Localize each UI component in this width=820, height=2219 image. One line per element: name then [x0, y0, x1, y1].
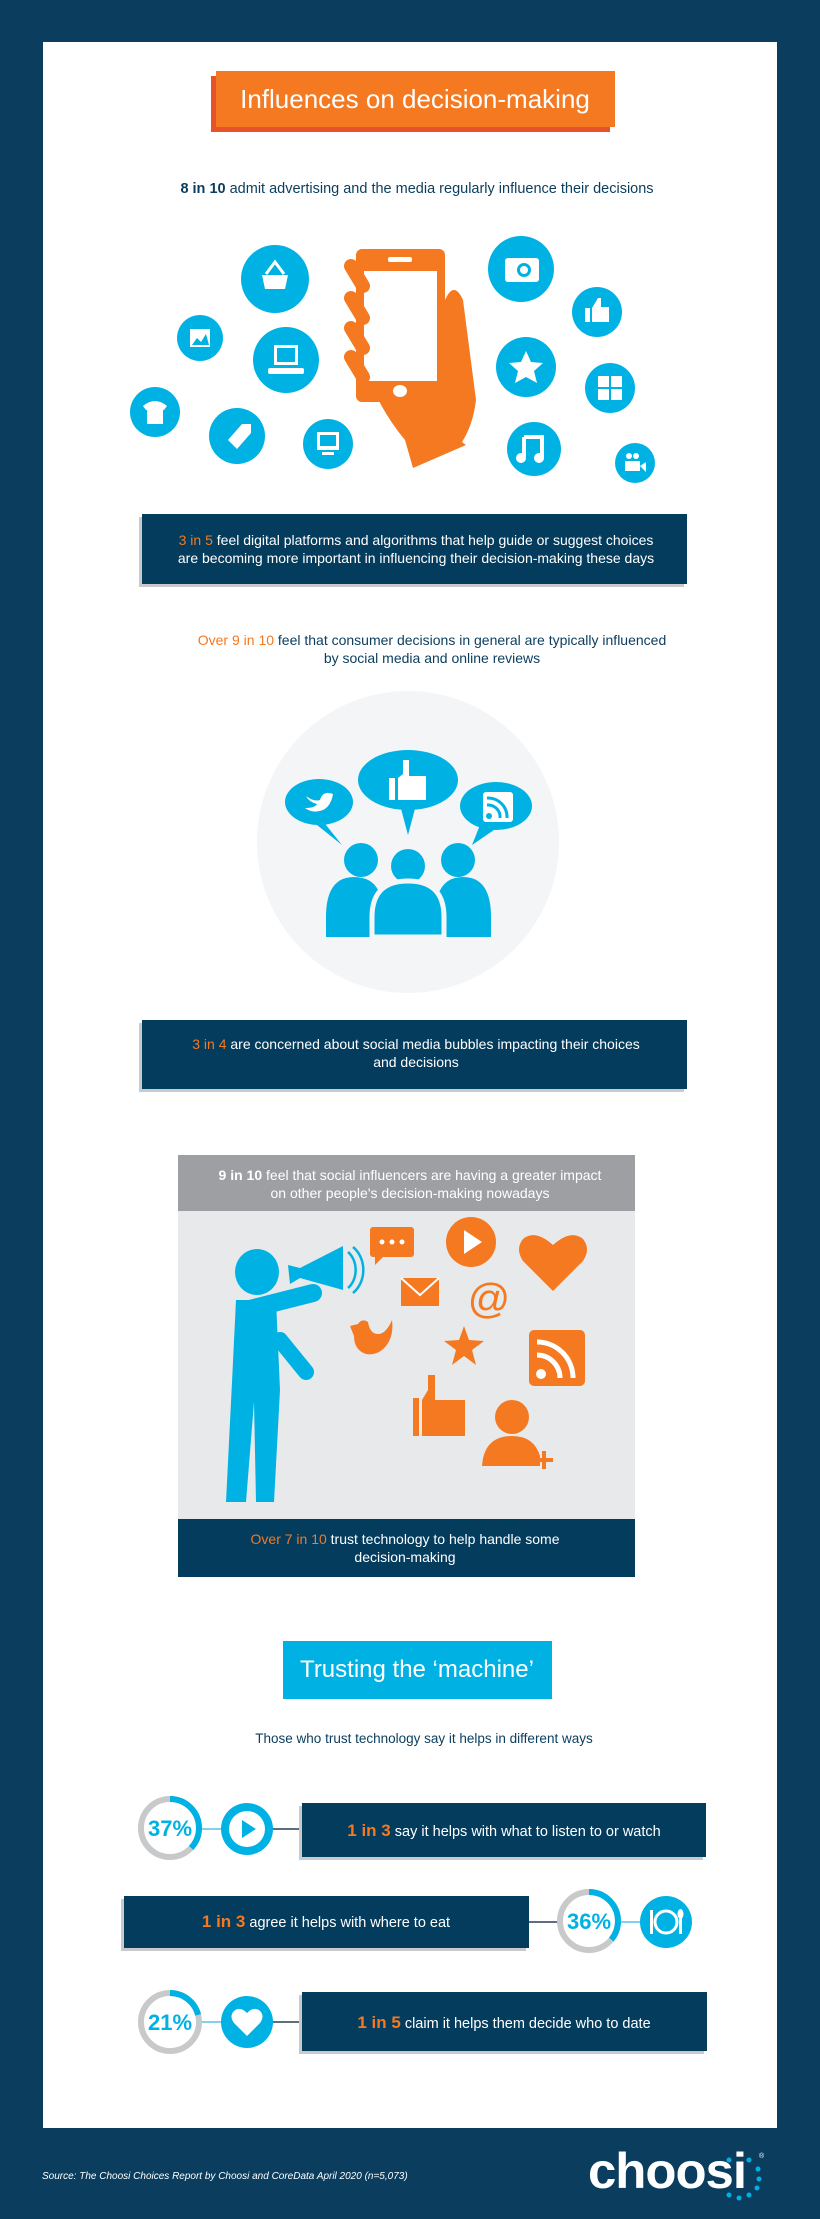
- ring: 37%: 37%: [148, 1816, 192, 1841]
- callout: 3 in 5: are becoming more important in influencing their decision-making these days: [178, 550, 654, 566]
- header: 9 in 10: [178, 1155, 635, 1211]
- text: Over 9 in 10: by social media and online reviews: [324, 650, 540, 666]
- ring: 36%: [560, 1892, 618, 1950]
- row: who to date: [141, 1992, 707, 2054]
- bubble: like: [358, 750, 458, 835]
- icons: social media orange: @: [468, 1275, 510, 1322]
- ring: 36%: 36%: [567, 1909, 611, 1934]
- icon: laptop: [253, 327, 319, 393]
- icon: music note: [507, 422, 561, 476]
- footer: over 7 in 10: Over 7 in 10 trust technology to help handle some: [251, 1531, 560, 1547]
- row: listen or watch: 1 in 3 say it helps with what to listen to or watch: [347, 1821, 661, 1840]
- footer: over 7 in 10: decision-making: [354, 1549, 456, 1565]
- callout: 3 in 4: [139, 1020, 687, 1092]
- figure: person with megaphone: [226, 1246, 363, 1502]
- row: listen or watch: [141, 1799, 706, 1860]
- illustration: people with social bubbles: [257, 691, 559, 993]
- ring: 21%: [141, 1993, 199, 2051]
- bubble: twitter: [285, 779, 353, 845]
- icon: video camera: [615, 443, 655, 483]
- icon: thumbs up: [572, 287, 622, 337]
- ring: 37%: [141, 1799, 199, 1857]
- ring: 21%: 21%: [148, 2010, 192, 2035]
- icon: star: [496, 337, 556, 397]
- icon: monitor: [303, 419, 353, 469]
- panel: social influencers: [178, 1155, 635, 1577]
- heading: Trusting the machine: [283, 1641, 552, 1699]
- source note: Source: The Choosi Choices Report by Choosi and CoreData April 2020 (n=5,073): [42, 2171, 408, 2182]
- icon: plate and cutlery: [640, 1896, 692, 1948]
- text: Over 9 in 10: Over 9 in 10 feel that consumer decisions in general are typically influenced: [198, 632, 666, 648]
- callout: 3 in 4: 3 in 4 are concerned about social media bubbles impacting their choices: [192, 1036, 640, 1052]
- row: where to eat: 1 in 3 agree it helps with where to eat: [202, 1912, 450, 1931]
- icon: picture: [177, 315, 223, 361]
- callout: 3 in 4: and decisions: [373, 1054, 459, 1070]
- people: [326, 843, 491, 937]
- text: Over 9 in 10: [198, 632, 666, 666]
- bubble: rss: [460, 782, 532, 845]
- row: where to eat: [121, 1892, 692, 1951]
- icon: heart: [221, 1996, 273, 2048]
- logo: choosi: ®: [759, 2152, 765, 2160]
- header: 9 in 10: on other people's decision-making nowadays: [271, 1185, 549, 1201]
- icon: tag: [209, 408, 265, 464]
- icon: camera: [488, 236, 554, 302]
- heading: Trusting the machine: Trusting the ‘machine’: [300, 1656, 534, 1683]
- row: who to date: 1 in 5 claim it helps them decide who to date: [357, 2013, 651, 2032]
- logo: choosi: choosi: [588, 2143, 746, 2199]
- illustration: hand holding phone with app icons: [130, 236, 655, 483]
- callout: 3 in 5: [139, 514, 687, 587]
- title: Influences on decision-making: [211, 71, 615, 132]
- icon: calculator: [585, 363, 635, 413]
- header: 9 in 10: 9 in 10 feel that social influencers are having a greater impact: [219, 1167, 602, 1183]
- icon: phone in hand: [351, 249, 476, 468]
- text: 8 in 10: 8 in 10 admit advertising and the media regularly influence their decisions: [180, 181, 654, 197]
- text: subtitle: Those who trust technology say it helps in different ways: [255, 1731, 593, 1746]
- footer: over 7 in 10: [178, 1519, 635, 1577]
- icon: play: [221, 1803, 273, 1855]
- title: Influences on decision-making: Influences on decision-making: [240, 84, 590, 114]
- icon: telephone: [130, 387, 180, 437]
- icons: social media orange: [350, 1217, 587, 1469]
- callout: 3 in 5: 3 in 5 feel digital platforms and algorithms that help guide or suggest choices: [179, 532, 653, 548]
- icon: basket: [241, 245, 309, 313]
